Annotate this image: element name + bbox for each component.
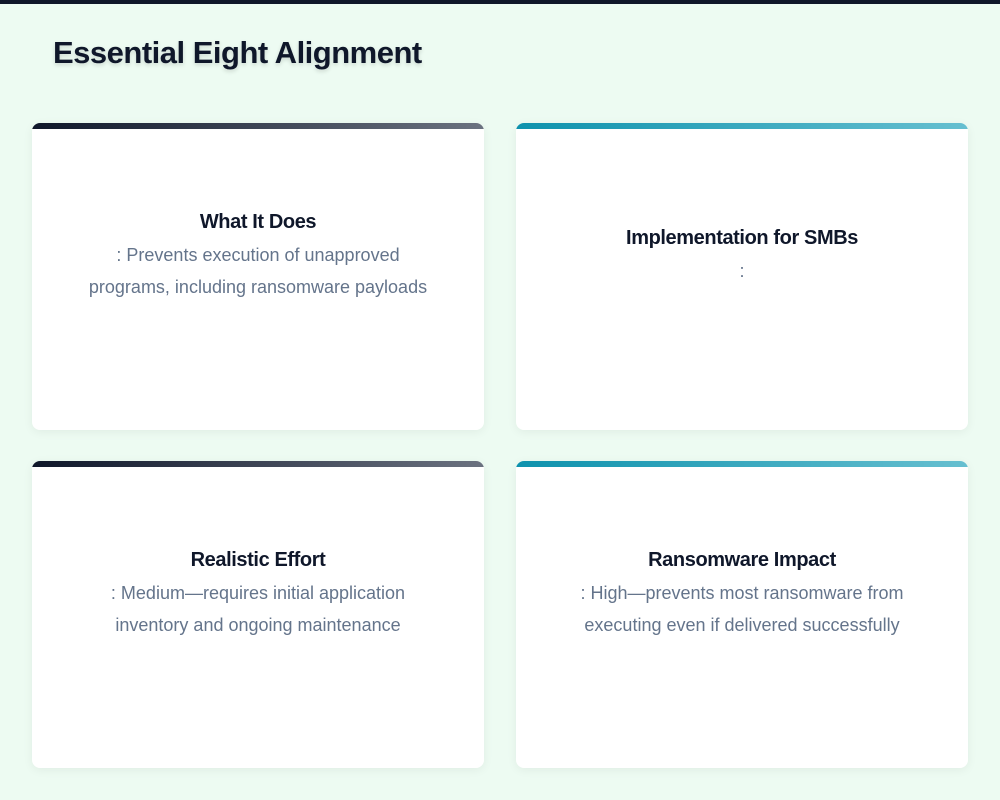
text block: :: [739, 260, 744, 280]
panel: implementation: [516, 123, 968, 430]
text block: : Prevents execution of unapproved programs, including ransomware payloads: [89, 244, 427, 296]
heading: Realistic Effort: [191, 548, 325, 570]
heading: Ransomware Impact: [648, 548, 836, 570]
heading: What It Does: [200, 210, 316, 232]
title: Essential Eight Alignment: [53, 35, 422, 70]
heading: Implementation for SMBs: [626, 226, 858, 248]
text block: : High—prevents most ransomware from executing even if delivered successfully: [580, 582, 904, 634]
panel: ransomware impact: [516, 461, 968, 768]
panel: realistic effort: [32, 461, 484, 768]
panel: what it does: [32, 123, 484, 430]
text block: : Medium—requires initial application inventory and ongoing maintenance: [111, 582, 405, 634]
